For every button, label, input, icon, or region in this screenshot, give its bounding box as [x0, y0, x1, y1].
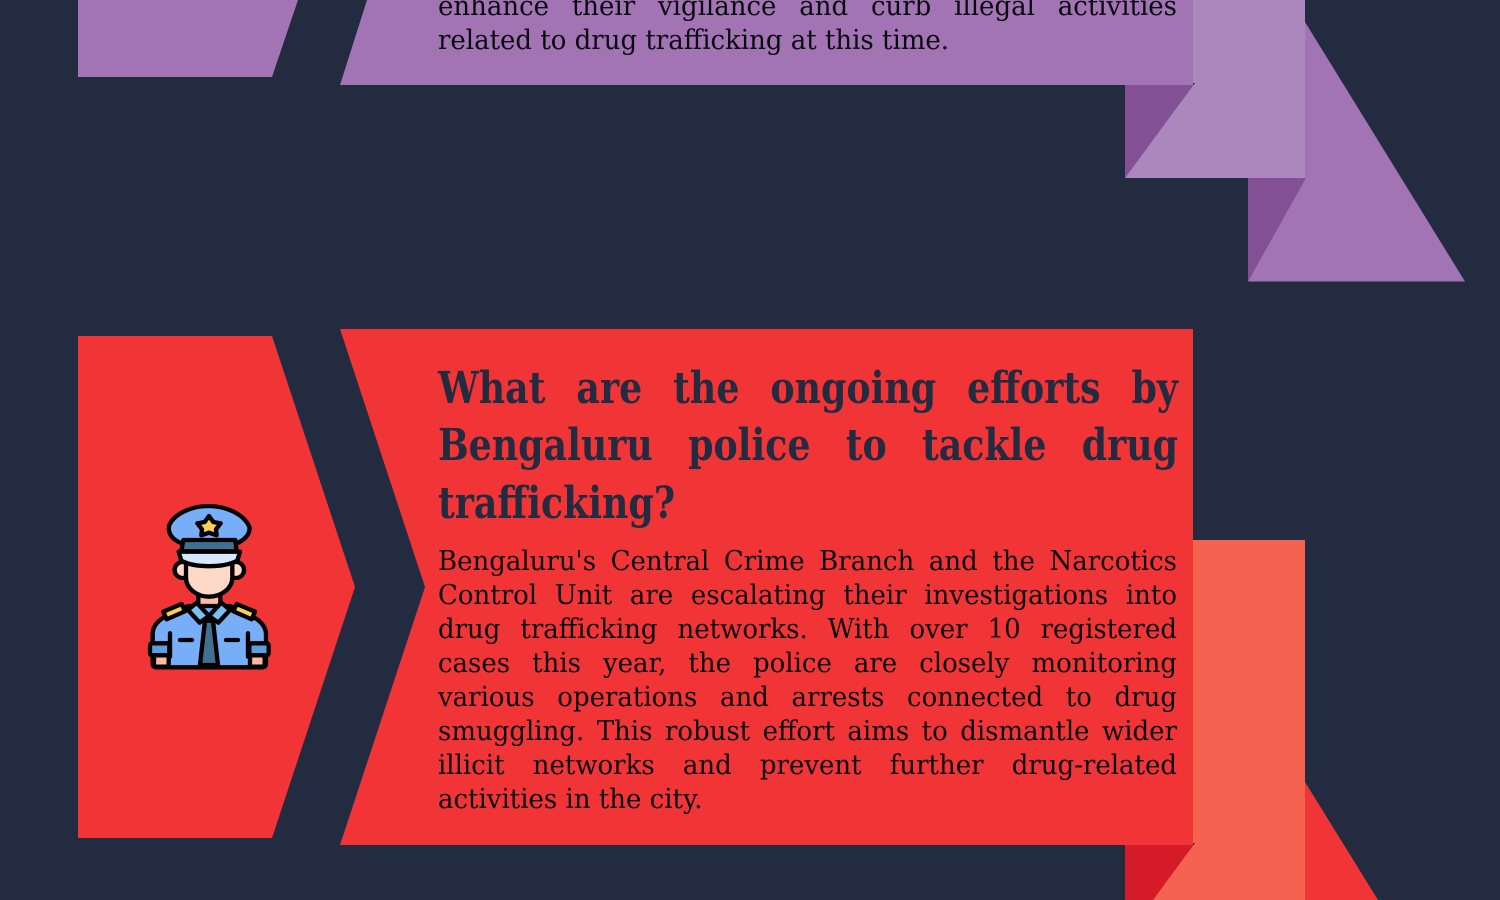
red panel body text: cases this year, the police are closely monitoring: [438, 647, 1177, 679]
icon: hat band: [181, 540, 237, 551]
red main panel: [340, 329, 1193, 845]
purple panel text: [438, 0, 1177, 56]
icon: neck: [198, 590, 220, 613]
icon: sleeve ends: [154, 655, 265, 667]
icon: ears: [175, 562, 244, 578]
purple left chevron panel: [78, 0, 298, 77]
red panel heading: Bengaluru police to tackle drug: [438, 420, 1178, 471]
purple ribbon fold front: [1125, 0, 1305, 178]
red panel heading: trafficking?: [438, 478, 675, 529]
red panel heading: What are the ongoing efforts by: [438, 363, 1178, 414]
purple ribbon fold back triangle: [1248, 22, 1465, 282]
red panel body text: Bengaluru's Central Crime Branch and the Narcotics: [438, 544, 1177, 576]
red panel body text: activities in the city.: [438, 783, 702, 815]
icon: cuffs: [150, 643, 269, 655]
icon: epaulette left: [163, 604, 185, 619]
icon: hat crown: [169, 506, 250, 543]
icon: collar: [188, 603, 230, 623]
red fold shadow: [1125, 845, 1195, 900]
purple panel text: related to drug trafficking at this time.: [438, 24, 949, 56]
red panel body text: Control Unit are escalating their investigations into: [438, 579, 1177, 611]
red panel heading: [438, 363, 1179, 529]
purple fold shadow lower: [1248, 178, 1306, 282]
red ribbon fold front: [1153, 540, 1305, 900]
purple fold shadow upper: [1125, 85, 1195, 178]
icon: uniform body: [153, 606, 266, 667]
icon: pockets and seams: [170, 633, 248, 657]
icon: hat brim: [179, 552, 240, 566]
icon: epaulette right: [233, 604, 255, 619]
red left chevron panel: [78, 336, 355, 838]
red panel body text: smuggling. This robust effort aims to dismantle wider: [438, 715, 1177, 747]
icon: police officer: [150, 506, 269, 667]
red panel body text: drug trafficking networks. With over 10 registered: [438, 613, 1177, 645]
red panel body text: various operations and arrests connected to drug: [438, 681, 1177, 713]
icon: face: [186, 561, 232, 597]
icon: tie: [200, 621, 218, 665]
red panel body text: [438, 544, 1178, 815]
icon: hat star: [197, 516, 221, 535]
purple main panel: [340, 0, 1193, 85]
red panel body text: illicit networks and prevent further drug-related: [438, 749, 1177, 781]
red ribbon fold back triangle: [1305, 782, 1378, 900]
